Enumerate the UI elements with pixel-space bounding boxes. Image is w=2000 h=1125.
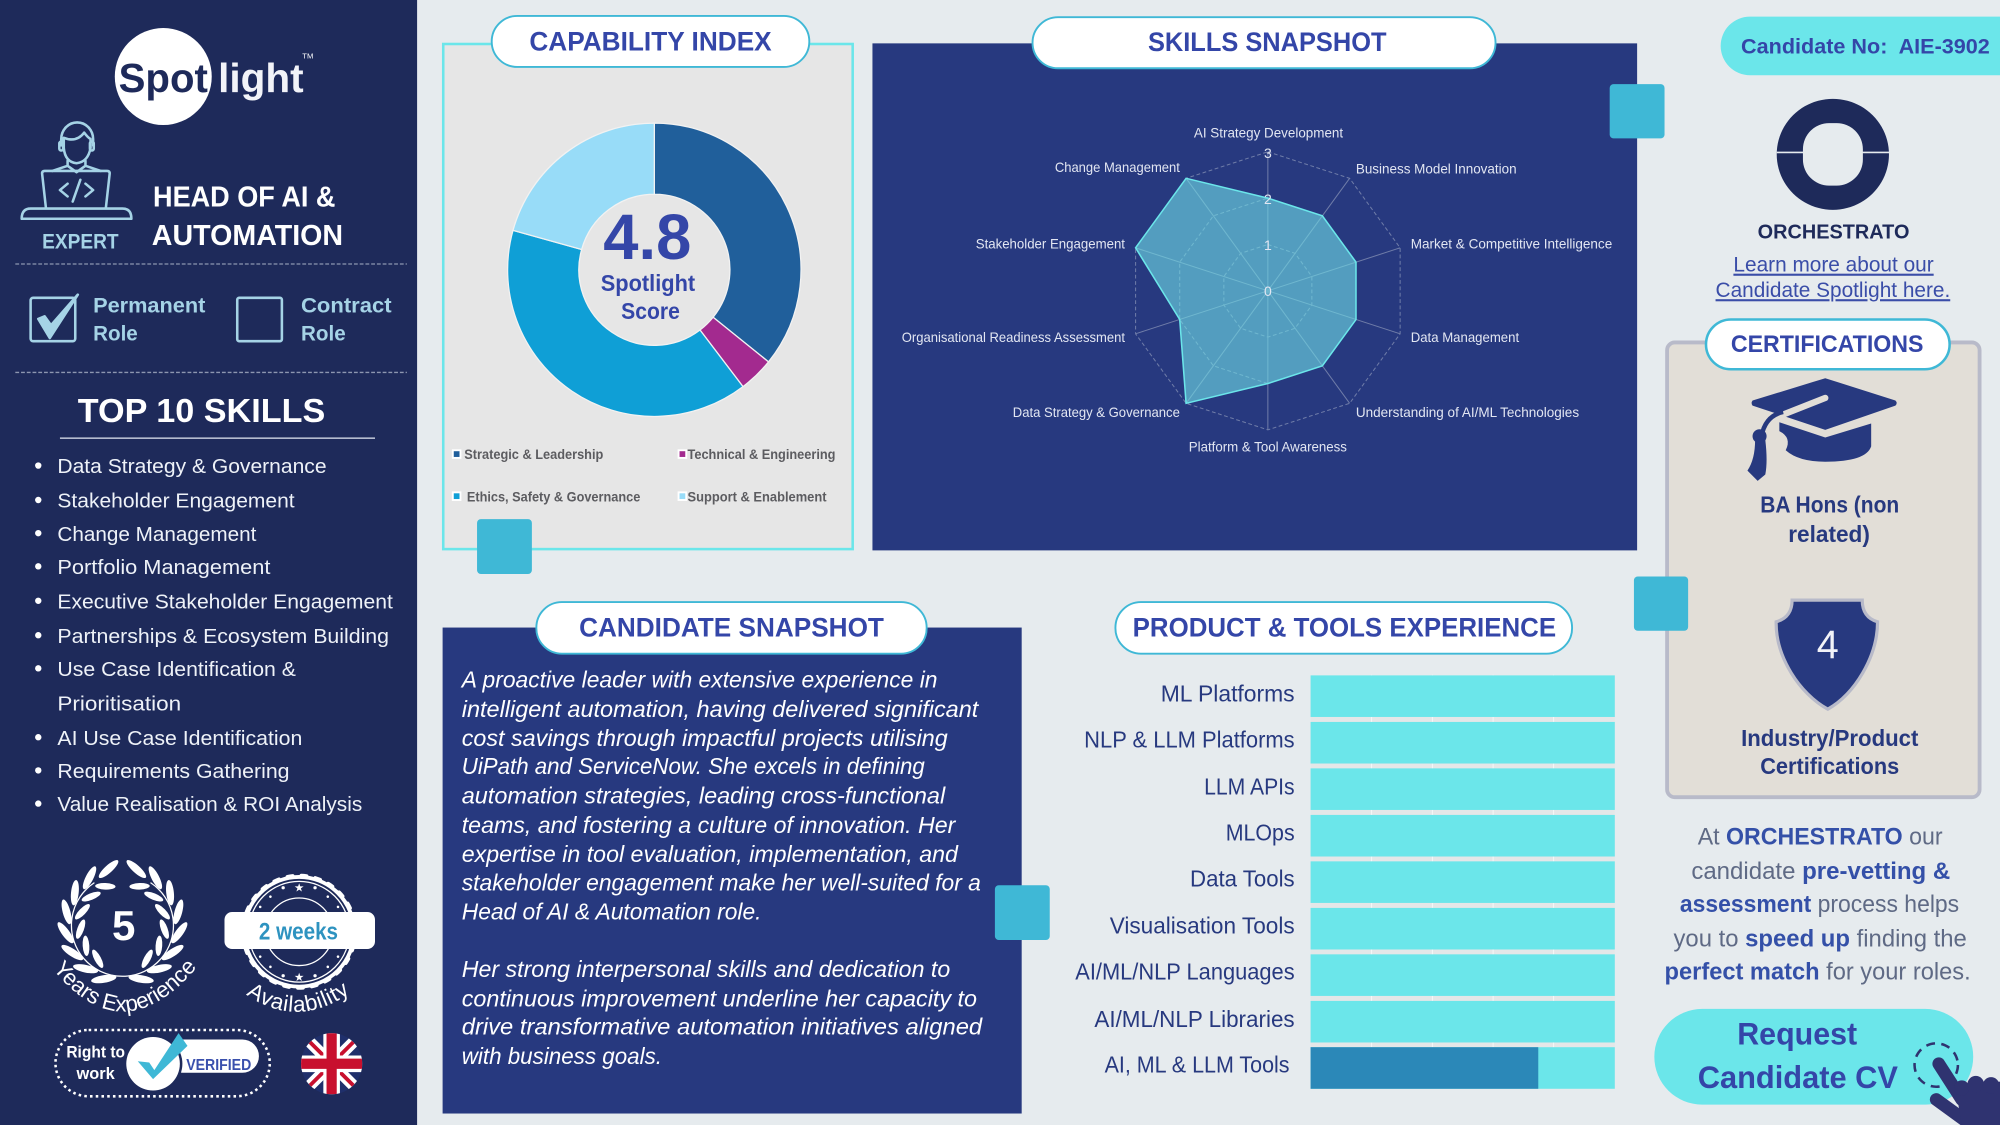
radar chart: 0 — [1264, 283, 1272, 299]
list: top skills: Use Case Identification & — [57, 659, 296, 681]
spotlight score: Spotlight — [601, 270, 695, 296]
text: pre-vetting process: candidate pre-vetting & — [1691, 858, 1950, 885]
panel: left sidebar — [0, 0, 418, 1125]
contract role checkbox: Contract — [301, 295, 392, 318]
text: pre-vetting process: assessment process helps — [1680, 891, 1959, 918]
candidate summary text: drive transformative automation initiatives aligned — [462, 1013, 983, 1039]
list: top skills: Portfolio Management — [57, 557, 271, 579]
permanent role checkbox — [31, 294, 205, 346]
list: top skills — [35, 456, 393, 816]
text: pre-vetting process — [1665, 823, 1971, 986]
panel: candidate snapshot — [443, 602, 1022, 1114]
legend: Ethics, Safety & Governance — [467, 488, 640, 504]
heading pill: skills snapshot: SKILLS SNAPSHOT — [1148, 27, 1387, 57]
logo: Orchestrato: ORCHESTRATO — [1758, 222, 1909, 244]
heading pill: skills snapshot — [1033, 17, 1496, 68]
candidate summary text: intelligent automation, having delivered significant — [462, 696, 980, 722]
list: top skills: Stakeholder Engagement — [57, 491, 295, 513]
candidate summary text — [460, 666, 983, 1069]
candidate summary text: Head of AI & Automation role. — [462, 899, 761, 925]
radar chart: 1 — [1264, 237, 1272, 253]
degree text — [1760, 492, 1899, 547]
heading pill: candidate snapshot: CANDIDATE SNAPSHOT — [579, 612, 885, 642]
logo: Orchestrato — [1758, 99, 1909, 244]
logo: Spotlight — [115, 28, 313, 125]
connector square: capability — [477, 519, 532, 574]
candidate summary text: cost savings through impactful projects utilising — [462, 725, 948, 751]
logo: Spotlight: light — [218, 55, 304, 101]
badge: availability stamp: ★ — [294, 972, 304, 984]
radar chart: Understanding of AI/ML Technologies — [1356, 404, 1579, 420]
certifications text: Industry/Product — [1741, 725, 1919, 751]
candidate summary text: A proactive leader with extensive experience in — [460, 667, 937, 693]
badge: availability stamp — [224, 874, 375, 1012]
radar chart: Data Management — [1411, 329, 1519, 345]
label: expert: EXPERT — [42, 229, 119, 254]
legend — [453, 446, 835, 504]
list: top skills: Value Realisation & ROI Analysis — [57, 794, 362, 816]
heading: top 10 skills: TOP 10 SKILLS — [78, 393, 325, 430]
badge: right to work verified: work — [76, 1064, 116, 1083]
contract role checkbox: Role — [301, 323, 346, 346]
text: pre-vetting process: you to speed up finding the — [1673, 925, 1967, 952]
heading pill: product and tools — [1115, 602, 1572, 654]
radar chart — [902, 125, 1612, 455]
radar chart: Data Strategy & Governance — [1013, 404, 1180, 420]
icon: UK flag — [301, 1033, 362, 1094]
radar chart: Platform & Tool Awareness — [1189, 439, 1347, 455]
button: request candidate CV — [1654, 1009, 1973, 1105]
list: top skills: Requirements Gathering — [57, 761, 290, 783]
icon: clicking hand — [1915, 1043, 2000, 1125]
radar chart: 3 — [1264, 145, 1272, 161]
list: top skills: Prioritisation — [57, 693, 181, 715]
bar chart: Visualisation Tools — [1110, 913, 1295, 939]
badge: right to work verified — [55, 1030, 270, 1096]
job title: HEAD OF AI & — [153, 182, 335, 214]
list: top skills: Executive Stakeholder Engagement — [57, 591, 393, 613]
permanent role checkbox: Role — [93, 323, 138, 346]
panel: capability index — [443, 16, 853, 549]
contract role checkbox — [237, 294, 392, 346]
text: pre-vetting process: At ORCHESTRATO our — [1698, 823, 1943, 850]
radar chart: Market & Competitive Intelligence — [1411, 236, 1612, 252]
bar chart: MLOps — [1226, 820, 1295, 846]
candidate number pill: Candidate No: AIE-3902 — [1741, 34, 1990, 59]
bar chart: Data Tools — [1190, 865, 1295, 891]
job title: AUTOMATION — [152, 220, 343, 252]
list: top skills: AI Use Case Identification — [57, 728, 302, 750]
text: pre-vetting process: perfect match for your roles. — [1665, 959, 1971, 986]
candidate summary text: continuous improvement underline her capacity to — [462, 985, 977, 1011]
radar chart: AI Strategy Development — [1194, 125, 1343, 141]
bar chart: AI/ML/NLP Libraries — [1094, 1006, 1295, 1032]
badge: years experience laurel — [56, 860, 195, 1016]
icon: certification shield — [1776, 600, 1878, 709]
badge: right to work verified: Right to — [66, 1042, 125, 1061]
connector square: certifications — [1634, 577, 1688, 631]
radar chart: 2 — [1264, 191, 1272, 207]
logo: Spotlight: Spot — [119, 55, 208, 101]
legend: Strategic & Leadership — [464, 446, 603, 462]
legend: Support & Enablement — [688, 488, 827, 504]
heading pill: certifications — [1706, 320, 1950, 369]
heading pill: certifications: CERTIFICATIONS — [1731, 331, 1923, 358]
certifications text: Certifications — [1760, 753, 1899, 779]
link: learn more: Learn more about our — [1733, 254, 1934, 277]
list: top skills: Data Strategy & Governance — [57, 456, 327, 478]
badge: right to work verified: VERIFIED — [186, 1057, 251, 1074]
candidate summary text: with business goals. — [462, 1043, 662, 1069]
panel: certifications — [1667, 320, 1980, 797]
badge: years experience laurel: 5 — [112, 902, 135, 949]
connector square: candidate — [995, 885, 1050, 940]
link: learn more: Candidate Spotlight here. — [1716, 279, 1950, 302]
candidate summary text: automation strategies, leading cross-functional — [462, 783, 946, 809]
candidate summary text: expertise in tool evaluation, implementation, and — [462, 841, 959, 867]
heading pill: product and tools: PRODUCT & TOOLS EXPERIENCE — [1133, 612, 1556, 642]
radar chart: Change Management — [1055, 159, 1180, 175]
panel: skills snapshot — [872, 17, 1637, 550]
spotlight score: Score — [621, 298, 680, 324]
bar chart: NLP & LLM Platforms — [1084, 726, 1295, 752]
list: top skills: Change Management — [57, 524, 257, 546]
icon: graduation cap — [1747, 378, 1897, 481]
link: learn more — [1716, 254, 1950, 302]
heading pill: capability index: CAPABILITY INDEX — [529, 26, 772, 56]
donut chart — [508, 123, 801, 416]
logo: Spotlight: TM — [302, 52, 313, 61]
degree text: BA Hons (non — [1760, 492, 1899, 518]
bar chart: ML Platforms — [1161, 681, 1295, 707]
heading pill: capability index — [492, 16, 809, 67]
bar chart: AI, ML & LLM Tools — [1105, 1052, 1290, 1078]
candidate summary text: Her strong interpersonal skills and dedication to — [462, 956, 950, 982]
heading pill: candidate snapshot — [536, 602, 927, 654]
button: request candidate CV: Candidate CV — [1698, 1060, 1898, 1095]
button: request candidate CV: Request — [1737, 1017, 1858, 1052]
job title — [152, 182, 343, 252]
bar chart — [1075, 675, 1615, 1089]
bar chart: LLM APIs — [1204, 774, 1295, 800]
permanent role checkbox: Permanent — [93, 295, 205, 318]
radar chart: Business Model Innovation — [1356, 160, 1517, 176]
bar chart: AI/ML/NLP Languages — [1075, 959, 1295, 985]
badge: years experience laurel: Years Experience — [56, 959, 195, 1016]
spotlight score: 4.8 — [603, 201, 691, 273]
panel: product and tools experience — [1075, 602, 1615, 1089]
radar chart: Organisational Readiness Assessment — [902, 329, 1125, 345]
spotlight score — [601, 201, 695, 324]
badge: availability stamp: Availability — [246, 983, 347, 1012]
connector square: skills — [1610, 84, 1665, 138]
radar chart: Stakeholder Engagement — [976, 236, 1125, 252]
candidate number pill — [1721, 17, 2000, 75]
badge: availability stamp: 2 weeks — [259, 918, 338, 944]
list: top skills: Partnerships & Ecosystem Building — [57, 626, 389, 648]
degree text: related) — [1788, 521, 1870, 547]
icon: expert at laptop — [22, 122, 131, 219]
candidate summary text: stakeholder engagement make her well-suited for a — [462, 869, 981, 895]
badge: availability stamp: ★ — [294, 883, 304, 895]
legend: Technical & Engineering — [688, 446, 835, 462]
candidate summary text: teams, and fostering a culture of innovation. Her — [462, 812, 957, 838]
candidate summary text: UiPath and ServiceNow. She excels in defining — [462, 753, 925, 779]
certifications text — [1741, 725, 1919, 779]
icon: certification shield: 4 — [1817, 623, 1839, 667]
